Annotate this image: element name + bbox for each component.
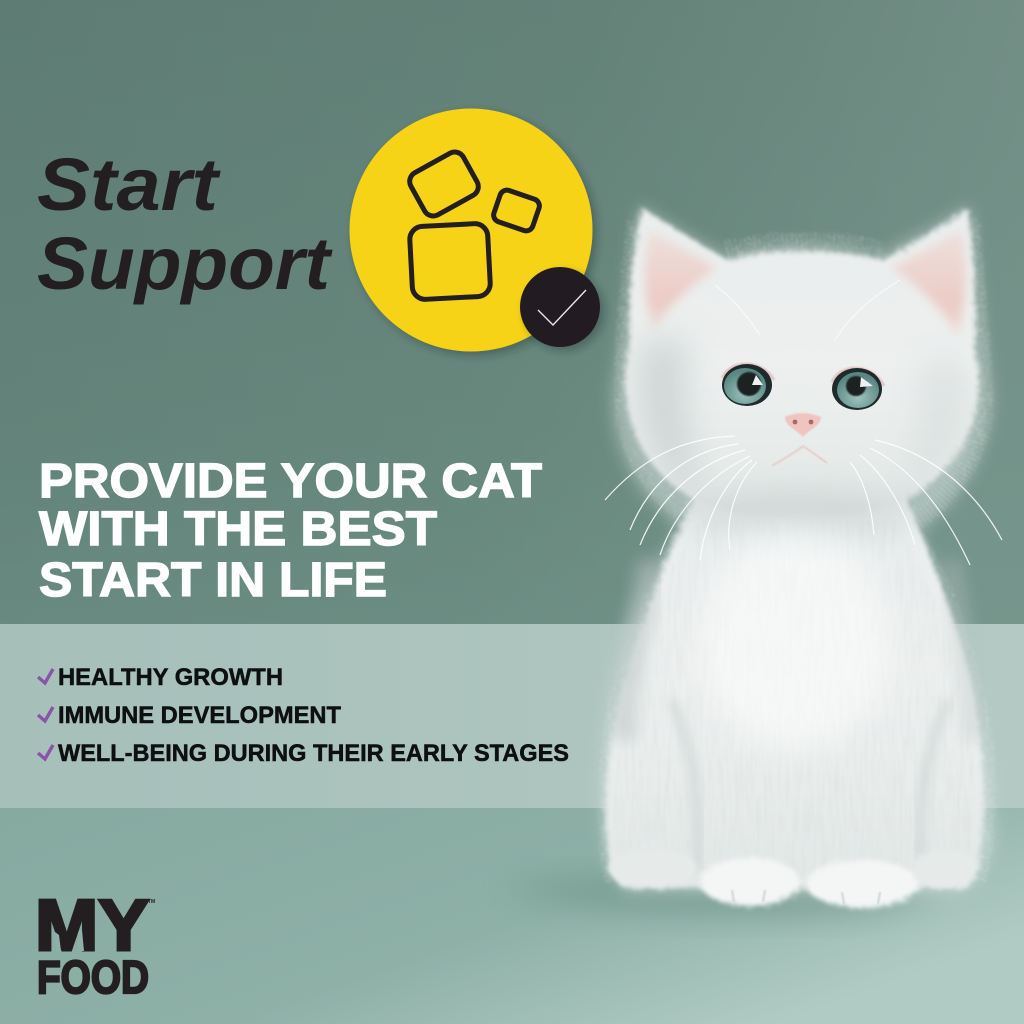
logo: My Food: FOOD <box>37 951 149 1003</box>
benefit: immune development: IMMUNE DEVELOPMENT <box>58 702 341 729</box>
icon: yellow circle with kibble outlines <box>350 108 600 352</box>
kitten nose and mouth <box>772 413 827 466</box>
kitten right eye <box>832 368 884 410</box>
logo: My Food: MY <box>35 886 149 966</box>
kitten shading <box>622 340 975 875</box>
kitten fur texture <box>613 520 975 880</box>
logo: My Food <box>35 886 155 1003</box>
headline: WITH THE BEST <box>39 503 437 556</box>
floor <box>0 808 1024 1024</box>
photo: white kitten <box>602 205 1002 908</box>
headline <box>39 455 542 607</box>
kitten left eye <box>722 364 774 406</box>
icon: check badge <box>520 267 600 347</box>
kitten floor shadow <box>500 878 930 916</box>
title <box>37 143 333 305</box>
title: Start <box>37 143 222 226</box>
benefits list <box>38 664 569 767</box>
kitten ears <box>645 230 965 336</box>
kitten body <box>606 208 984 888</box>
kitten toe lines <box>732 890 880 904</box>
kitten whiskers <box>605 280 1002 565</box>
headline: PROVIDE YOUR CAT <box>39 455 542 508</box>
benefit: healthy growth: HEALTHY GROWTH <box>58 664 283 691</box>
headline: START IN LIFE <box>39 554 387 607</box>
logo: pet silhouette cut-outs <box>55 930 84 951</box>
benefit: well-being: WELL-BEING DURING THEIR EARLY STAGES <box>58 740 569 767</box>
icon: kibble pieces <box>406 148 541 300</box>
logo: My Food: TM <box>148 899 155 905</box>
translucent benefits band <box>0 624 1024 808</box>
kitten radial fur hairs <box>608 220 984 880</box>
kitten paws <box>608 849 978 908</box>
title: Support <box>37 222 333 305</box>
kitten soft glow <box>602 205 994 892</box>
